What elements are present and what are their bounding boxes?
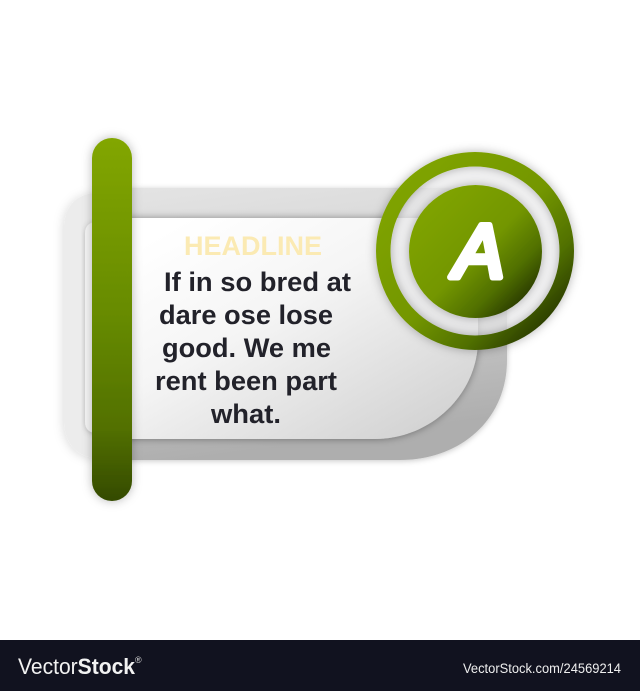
footer registered mark: ® xyxy=(135,655,142,665)
badge: letter: A xyxy=(450,209,504,293)
panel: left light card section xyxy=(64,193,120,458)
panel: outer grey card xyxy=(112,188,507,460)
footer bar xyxy=(0,640,640,691)
vertical green bar xyxy=(92,138,132,501)
badge: green disc xyxy=(409,185,542,318)
heading: HEADLINE xyxy=(184,231,322,261)
body text: rent been part xyxy=(155,366,337,396)
panel: inner white card xyxy=(112,218,478,439)
body text: If in so bred at xyxy=(164,267,351,297)
badge: translucent ring xyxy=(391,166,560,336)
body text xyxy=(155,267,351,429)
body text: what. xyxy=(210,399,281,429)
footer logo: VectorStock xyxy=(18,654,136,679)
badge: outer green ring xyxy=(376,152,574,350)
footer url: VectorStock.com/24569214 xyxy=(463,661,621,676)
badge with letter A xyxy=(376,152,574,350)
body text: good. We me xyxy=(162,333,331,363)
body text: dare ose lose xyxy=(159,300,333,330)
panel: left inner card section xyxy=(85,222,120,433)
